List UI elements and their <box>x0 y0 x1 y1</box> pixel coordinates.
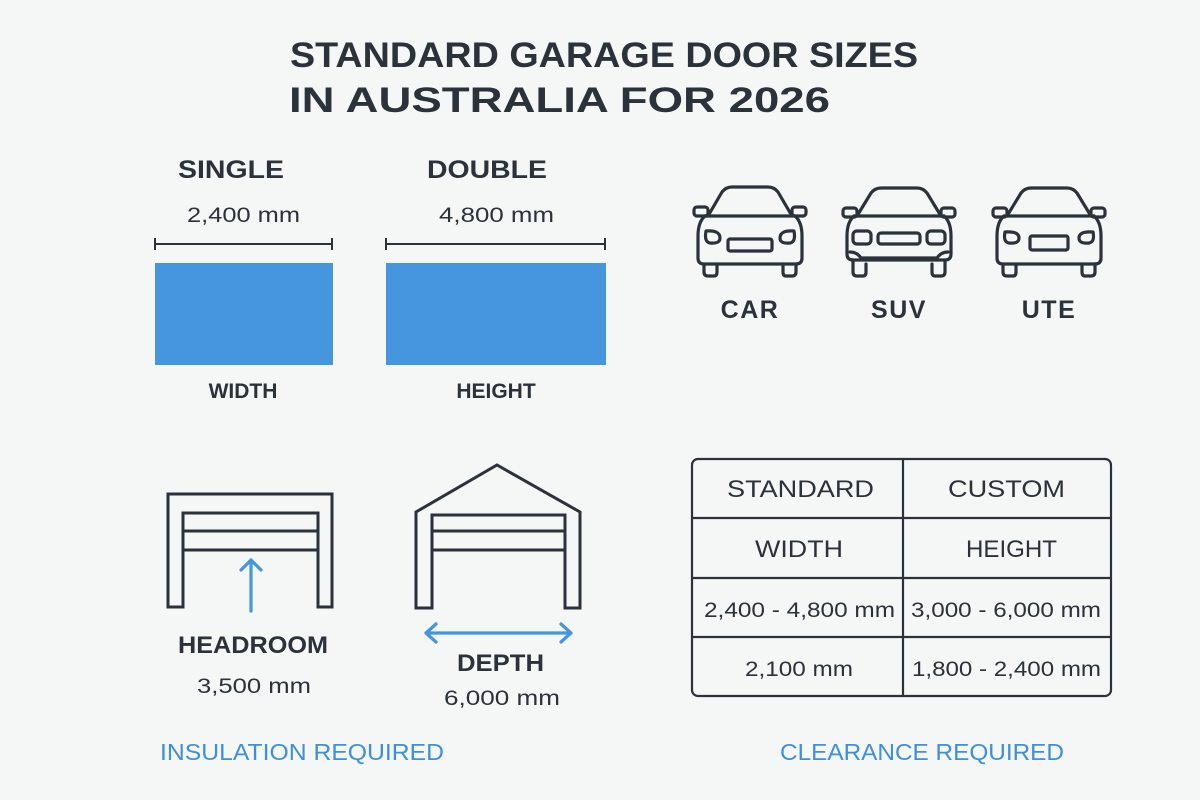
footer: insulation: INSULATION REQUIRED <box>160 739 444 765</box>
text: headroom <box>178 632 328 698</box>
panel: single door: SINGLE <box>178 156 284 184</box>
vehicle labels <box>721 296 1076 324</box>
title: STANDARD GARAGE DOOR SIZES <box>290 36 918 75</box>
table: 2,100 mm <box>745 658 853 681</box>
text: depth <box>444 650 560 710</box>
title <box>289 36 918 120</box>
panel: single door: 2,400 mm <box>187 204 300 227</box>
panel: single door <box>155 156 333 403</box>
icon: ute <box>993 188 1105 276</box>
vehicle labels: UTE <box>1022 296 1076 324</box>
vehicle labels: SUV <box>871 296 927 324</box>
table: 1,800 - 2,400 mm <box>912 658 1101 681</box>
panel: single door: WIDTH <box>209 380 277 403</box>
icon: car <box>694 187 806 276</box>
table: WIDTH <box>755 536 843 563</box>
panel: double door: 4,800 mm <box>439 204 554 227</box>
arrow: depth <box>426 624 571 642</box>
icon: garage headroom <box>168 494 332 607</box>
icon: garage depth <box>416 465 580 608</box>
vehicle labels: CAR <box>721 296 779 324</box>
text: headroom: 3,500 mm <box>197 675 311 698</box>
table: 2,400 - 4,800 mm <box>704 599 895 622</box>
text: headroom: HEADROOM <box>178 632 328 659</box>
table <box>692 459 1111 696</box>
table: STANDARD <box>727 476 874 503</box>
table: 3,000 - 6,000 mm <box>911 599 1101 622</box>
panel: double door: HEIGHT <box>456 380 536 403</box>
footer: clearance: CLEARANCE REQUIRED <box>780 739 1064 765</box>
text: depth: DEPTH <box>457 650 544 677</box>
icon: suv <box>843 188 955 276</box>
icons: vehicles <box>694 187 1105 276</box>
arrow: headroom up <box>241 560 261 611</box>
table: CUSTOM <box>948 476 1065 503</box>
title: IN AUSTRALIA FOR 2026 <box>289 81 830 120</box>
panel: double door: DOUBLE <box>427 156 547 184</box>
text: depth: 6,000 mm <box>444 687 560 710</box>
panel: double door <box>386 156 606 403</box>
table: HEIGHT <box>966 536 1057 563</box>
